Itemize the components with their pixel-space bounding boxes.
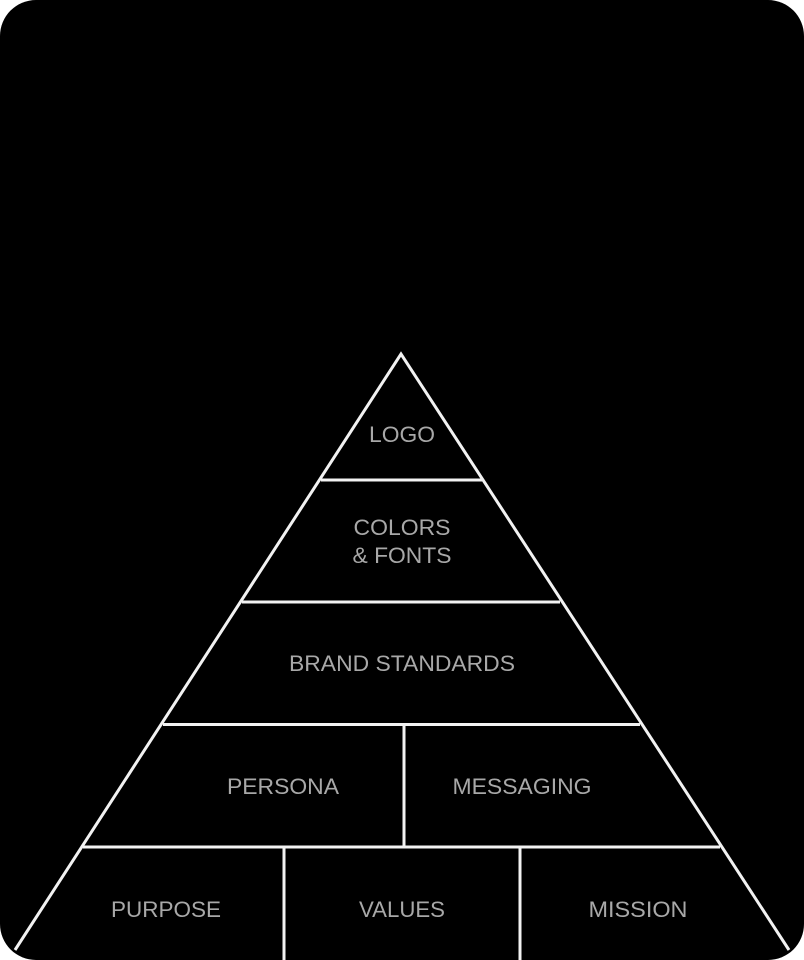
label: mission: MISSION	[588, 897, 688, 922]
label: logo: LOGO	[369, 422, 435, 447]
label: colors and fonts	[352, 515, 452, 568]
label: values: VALUES	[359, 897, 445, 922]
label: messaging: MESSAGING	[452, 774, 592, 799]
label: brand standards: BRAND STANDARDS	[289, 651, 515, 676]
label: colors and fonts: COLORS	[354, 515, 450, 540]
label: persona: PERSONA	[227, 774, 339, 799]
pyramid outline	[15, 354, 789, 960]
label: colors and fonts: & FONTS	[352, 543, 452, 568]
label: purpose: PURPOSE	[111, 897, 221, 922]
